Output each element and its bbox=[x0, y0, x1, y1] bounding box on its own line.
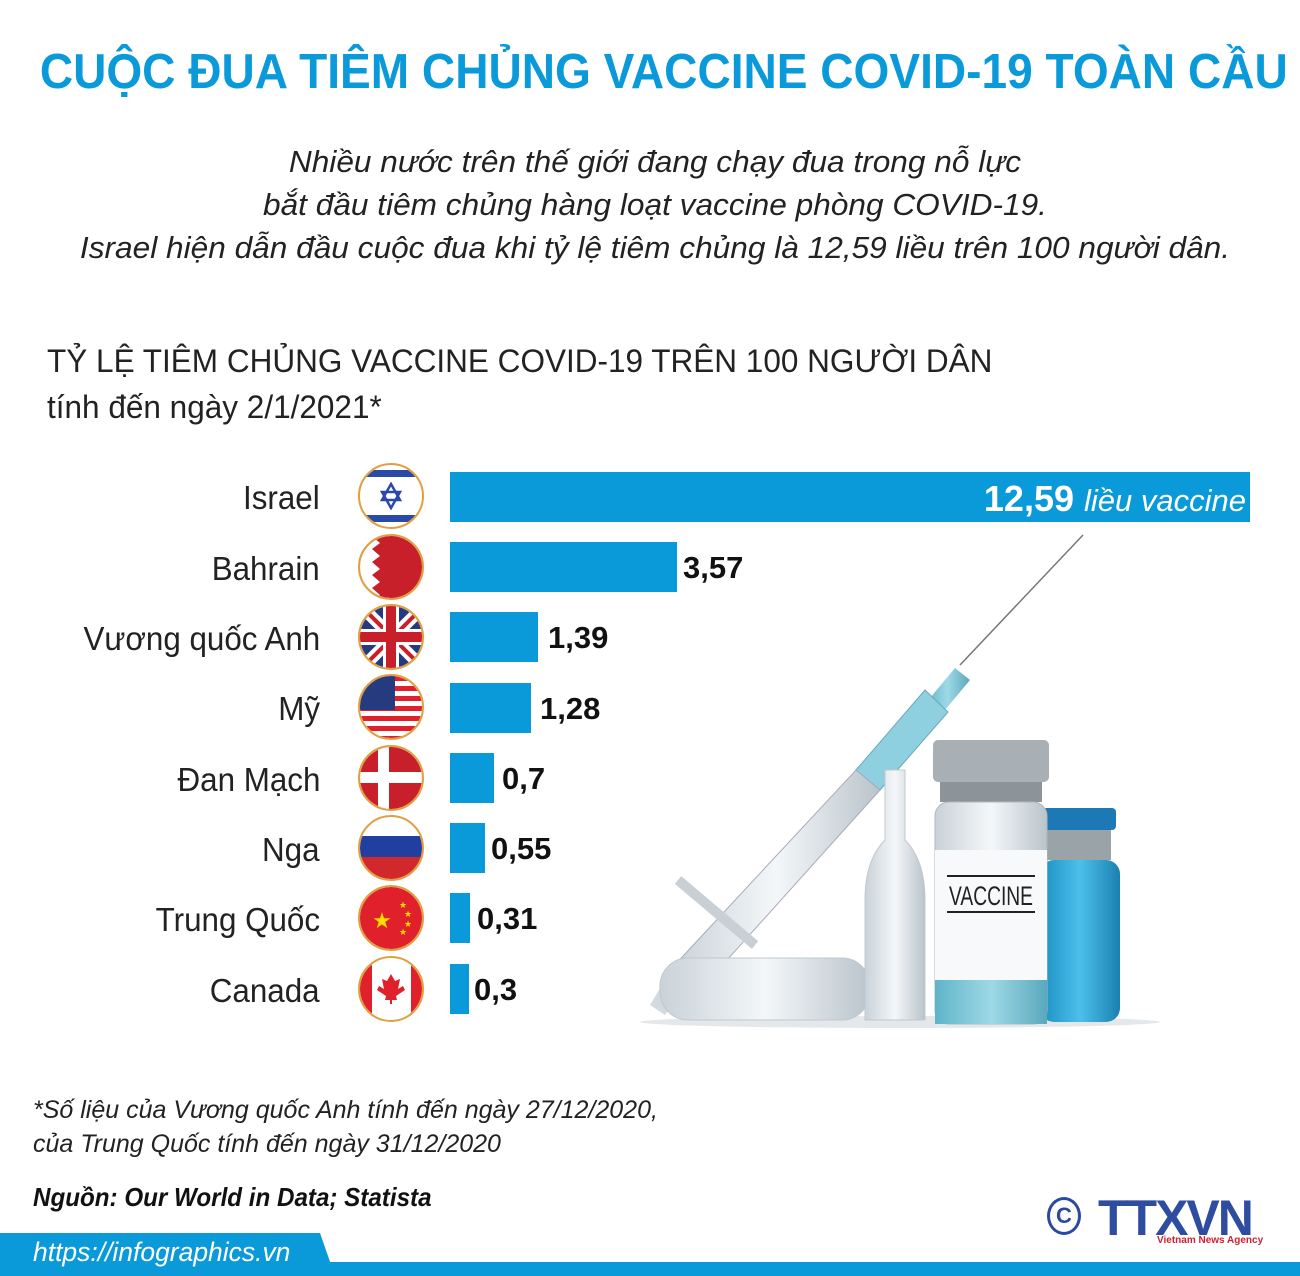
bar: Russia bbox=[450, 823, 485, 873]
bar chart bbox=[450, 472, 1250, 1014]
bar chart: 1,28 bbox=[540, 691, 600, 726]
chart heading: TỶ LỆ TIÊM CHỦNG VACCINE COVID-19 TRÊN 100 NGƯỜI DÂN bbox=[47, 343, 992, 379]
vaccine vial bbox=[933, 740, 1049, 1024]
flag: China: ★ bbox=[372, 908, 392, 933]
intro text bbox=[80, 144, 1230, 265]
blue vial bbox=[1040, 808, 1120, 1022]
flag: Israel bbox=[366, 470, 416, 522]
country labels: Canada bbox=[210, 972, 320, 1009]
country labels: Đan Mạch bbox=[177, 761, 320, 798]
logo: TTXVN: C bbox=[1056, 1203, 1072, 1228]
ampoule lying bbox=[660, 958, 870, 1020]
syringe bbox=[650, 535, 1083, 1015]
flags bbox=[358, 463, 424, 1022]
bar chart: 12,59 liều vaccine bbox=[984, 478, 1246, 519]
flag: China: ★ bbox=[399, 927, 407, 937]
flag: Bahrain bbox=[360, 536, 422, 598]
bar chart: 1,39 bbox=[548, 620, 608, 655]
bar chart: 0,55 bbox=[491, 831, 551, 866]
bar chart: 0,3 bbox=[474, 972, 517, 1007]
intro text: Nhiều nước trên thế giới đang chạy đua trong nỗ lực bbox=[289, 144, 1021, 179]
chart heading: tính đến ngày 2/1/2021* bbox=[47, 389, 382, 425]
country labels: Trung Quốc bbox=[156, 901, 320, 938]
bar chart: 0,31 bbox=[477, 901, 537, 936]
flag: UK bbox=[360, 606, 422, 668]
footnote: của Trung Quốc tính đến ngày 31/12/2020 bbox=[33, 1130, 501, 1158]
source: Nguồn: Our World in Data; Statista bbox=[33, 1182, 432, 1212]
flag: Canada bbox=[360, 964, 422, 1014]
flag: China: ★ bbox=[404, 919, 412, 929]
bar: UK bbox=[450, 612, 538, 662]
bar: Bahrain bbox=[450, 542, 677, 592]
logo: TTXVN: TTXVN bbox=[1098, 1190, 1252, 1246]
flag: China: ★ bbox=[399, 900, 407, 910]
illustration: syringe and vaccine vials bbox=[640, 534, 1160, 1028]
ampoule standing bbox=[865, 770, 925, 1020]
footer band with URL bbox=[0, 1233, 1300, 1276]
footnote bbox=[33, 1096, 658, 1158]
country labels: Nga bbox=[262, 831, 320, 868]
bar: Israel bbox=[450, 472, 1250, 522]
country labels: Mỹ bbox=[278, 690, 320, 727]
bar chart: 3,57 bbox=[683, 550, 743, 585]
bar chart: 0,7 bbox=[502, 761, 545, 796]
footer band with URL: https://infographics.vn bbox=[33, 1237, 290, 1267]
flag: Russia bbox=[360, 836, 422, 879]
bar: China bbox=[450, 893, 470, 943]
country labels: Bahrain bbox=[212, 550, 320, 587]
bar: Denmark bbox=[450, 753, 494, 803]
country labels: Vương quốc Anh bbox=[83, 620, 320, 657]
logo: TTXVN: Vietnam News Agency bbox=[1157, 1235, 1263, 1246]
title: CUỘC ĐUA TIÊM CHỦNG VACCINE COVID-19 TOÀN CẦU bbox=[40, 45, 1288, 99]
chart heading bbox=[47, 343, 992, 425]
flag: China: ★ bbox=[404, 909, 412, 919]
country labels: Israel bbox=[243, 479, 320, 516]
intro text: bắt đầu tiêm chủng hàng loạt vaccine phòng COVID-19. bbox=[263, 187, 1047, 222]
country labels bbox=[83, 479, 320, 1009]
bar: Canada bbox=[450, 964, 469, 1014]
footnote: *Số liệu của Vương quốc Anh tính đến ngày 27/12/2020, bbox=[33, 1096, 658, 1124]
intro text: Israel hiện dẫn đầu cuộc đua khi tỷ lệ tiêm chủng là 12,59 liều trên 100 người dân. bbox=[80, 230, 1230, 265]
vaccine vial: VACCINE bbox=[949, 881, 1033, 911]
flag: Denmark bbox=[360, 747, 422, 809]
flag: USA bbox=[360, 676, 422, 738]
flag: China bbox=[360, 887, 422, 949]
bar: USA bbox=[450, 683, 531, 733]
